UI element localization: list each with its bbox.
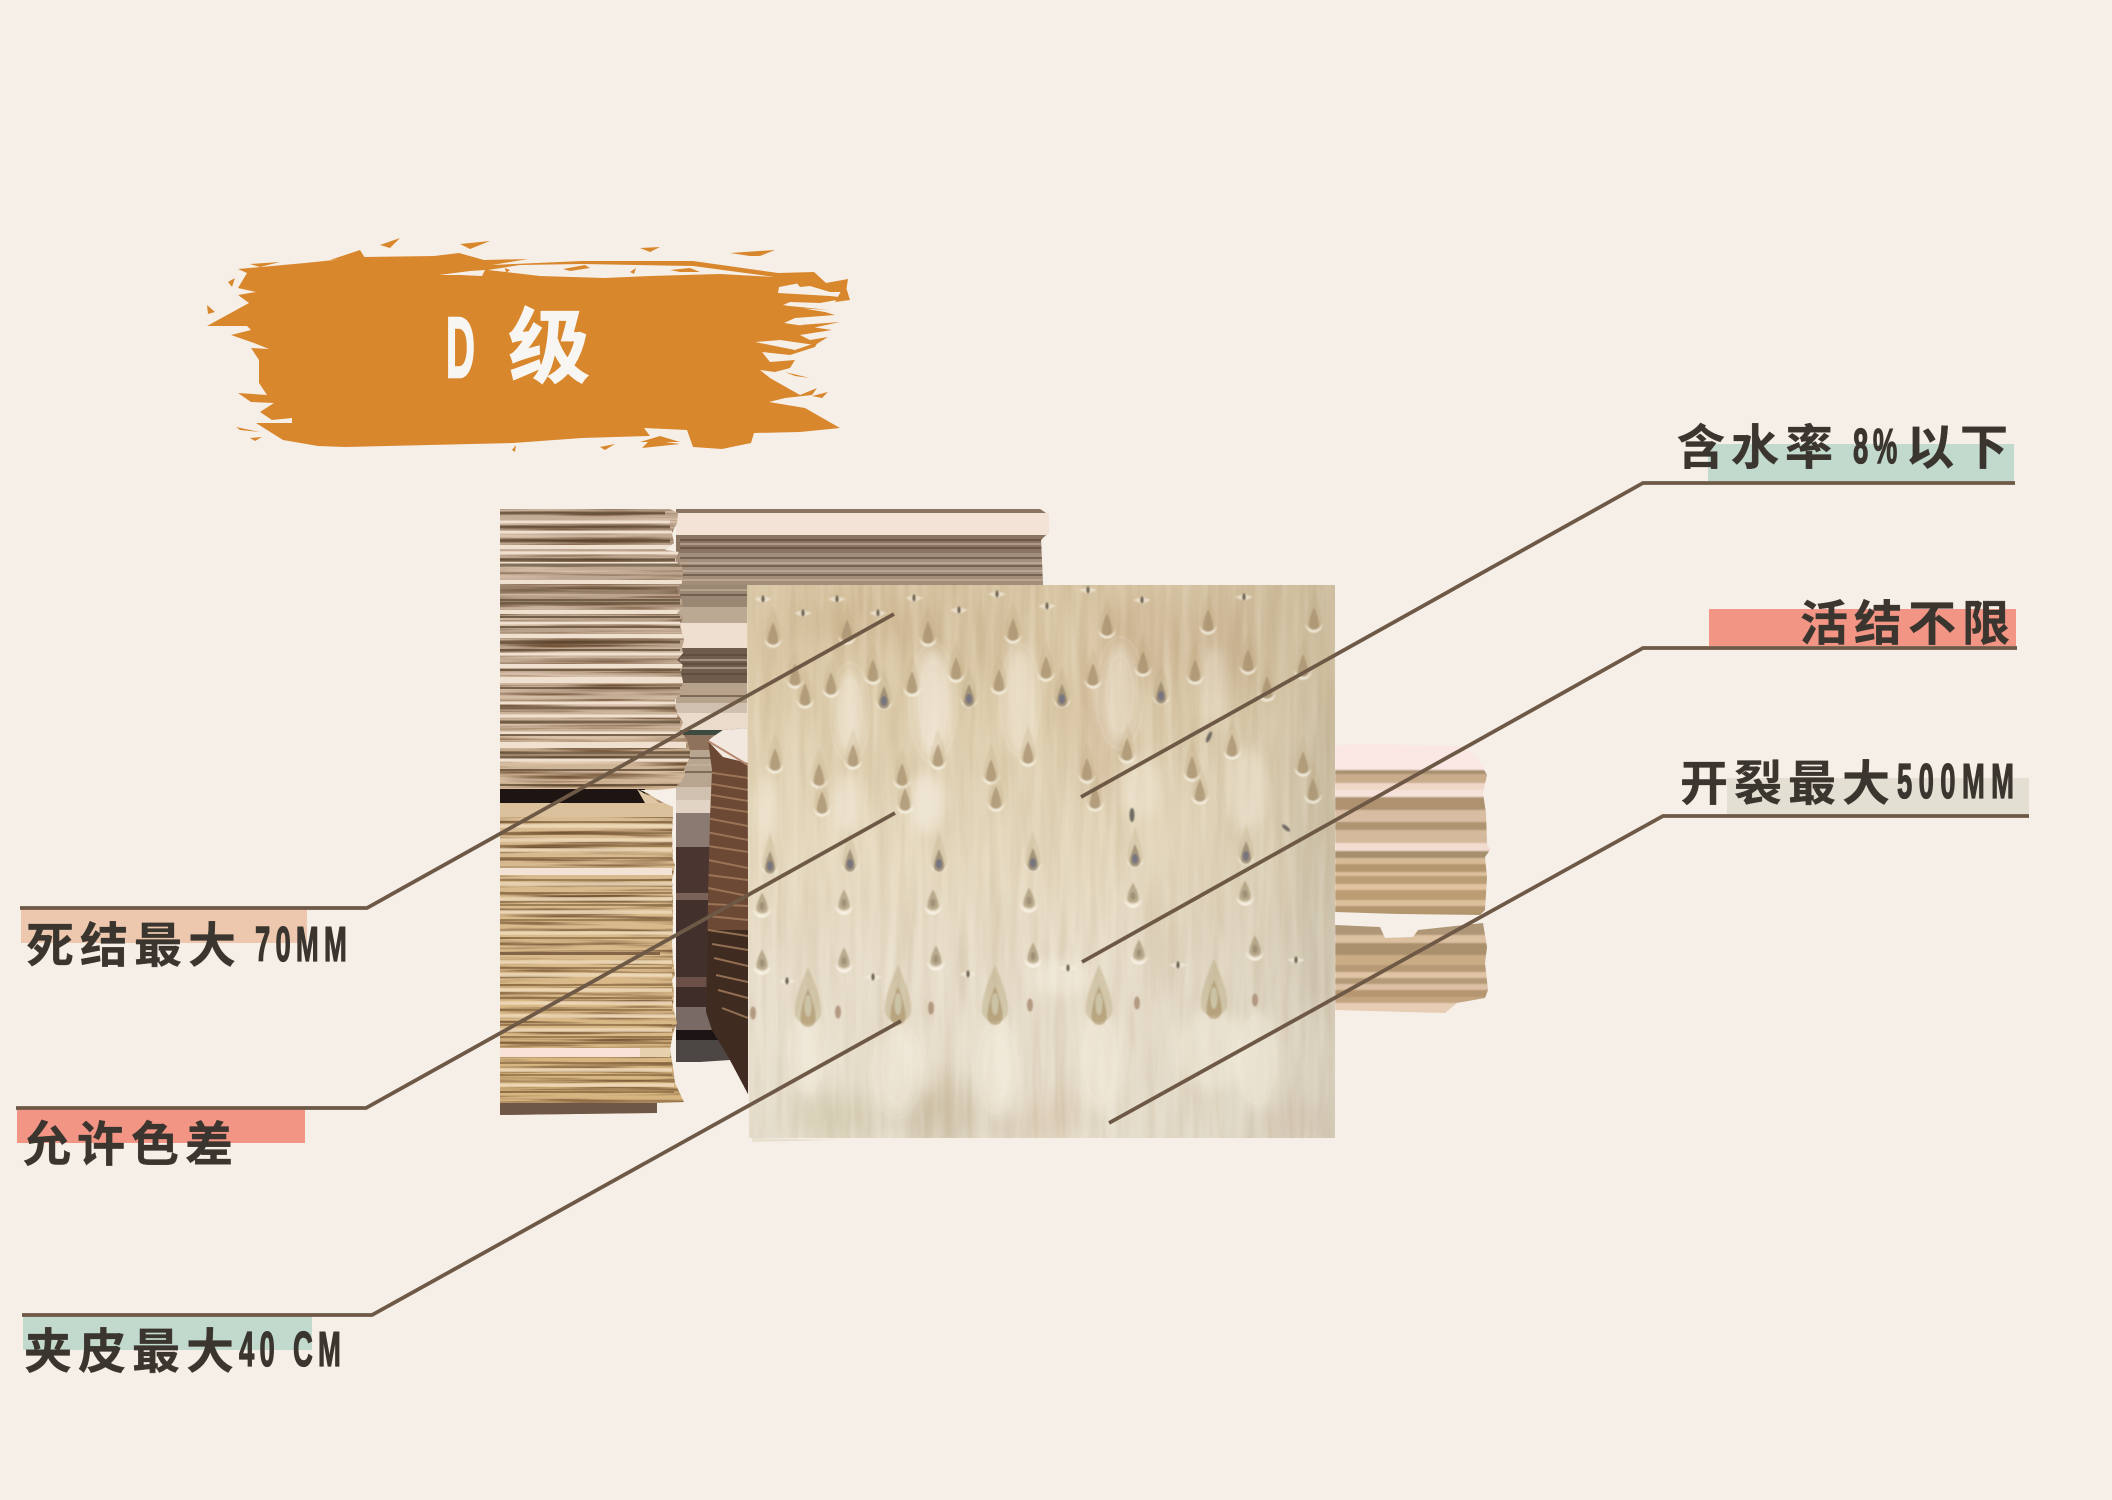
callout: 含水率 8%以下: 含水率: [1677, 422, 1839, 475]
callout: 活结不限: 活结不限: [1800, 598, 2016, 651]
callout: 开裂最大500MM: 500MM: [1897, 755, 2014, 809]
photo: small dark stack: [706, 728, 748, 1094]
title text: [446, 301, 590, 396]
light veneer edges: [500, 522, 690, 760]
tone patches: [788, 590, 1350, 1150]
callout: 死结最大 70MM: 70MM: [255, 918, 347, 972]
callout: 含水率 8%以下: 以下: [1906, 422, 2014, 475]
title text: 级: [508, 303, 590, 394]
title brush banner: [207, 238, 850, 452]
callout: 开裂最大500MM: 开裂最大: [1680, 758, 1896, 811]
callout: 允许色差: 允许色差: [23, 1119, 239, 1172]
grain contours: [838, 636, 1144, 749]
photo: front plywood panel with knots: [745, 583, 1350, 1150]
brush stroke: [207, 238, 850, 452]
callout: 开裂最大500MM: [1109, 755, 2029, 1123]
panel shadow edge: [752, 1138, 840, 1142]
callout: 夹皮最大 40 CM: [22, 1021, 901, 1379]
callout: 含水率 8%以下: 8%: [1853, 420, 1897, 474]
black gap: [500, 789, 645, 803]
callout: 含水率 8%以下: [1081, 420, 2015, 797]
callout: 活结不限: [1082, 598, 2017, 962]
pale grain lenses: [757, 643, 1279, 1117]
callout: 死结最大 70MM: [20, 614, 894, 973]
title text: D: [446, 301, 475, 396]
photo: right veneer stack: [1335, 768, 1490, 1013]
knots: [750, 586, 1323, 1027]
dark veneer seams: [500, 513, 690, 1092]
pale bands: [500, 868, 672, 875]
photo: left veneer stack: [500, 509, 695, 1119]
brush streaks: [439, 264, 775, 278]
callout: 夹皮最大 40 CM: 40 CM: [239, 1323, 341, 1377]
callout: 死结最大 70MM: 死结最大: [26, 920, 242, 973]
callout: 夹皮最大 40 CM: 夹皮最大: [24, 1326, 240, 1379]
photo: back veneer stack: [676, 509, 1051, 1064]
callout: 允许色差: [16, 813, 895, 1172]
